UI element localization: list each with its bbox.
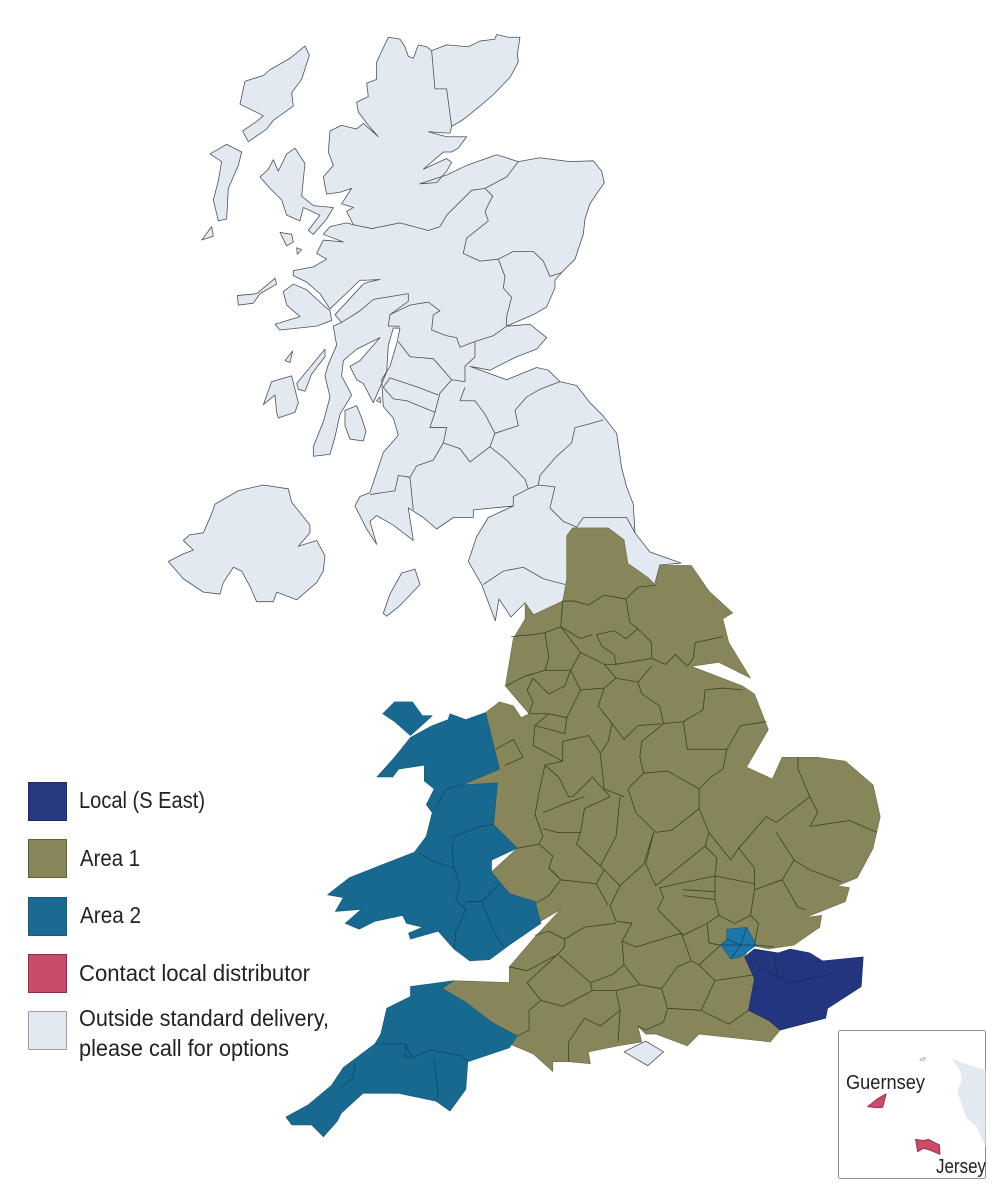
island: Islay [263,376,298,418]
region: Northern Ireland [168,485,325,602]
island: Isle of Man [383,569,420,616]
icon: Jersey [916,1139,940,1154]
county boundaries: Area 2 [339,785,503,1101]
map: England and Wales delivery zones [286,528,880,1137]
county boundaries: Scotland and northern England [342,51,635,584]
island: Colonsay [285,351,293,363]
legend item: Local (S East) [28,782,205,820]
zone: Local (S East), Kent [745,949,863,1030]
legend item: Contact local distributor: Contact local distributor [79,960,310,986]
inset: Channel Islands [838,1030,986,1178]
map: outside standard delivery (Scotland, Northern Ireland, northern England) [168,35,681,621]
region: Anglesey [383,702,432,735]
legend item: Local (S East): Local (S East) [79,787,205,813]
icon: Guernsey [868,1094,886,1108]
zone: Greater London, Area 2 [721,927,756,959]
island: Jura [297,349,325,391]
island: Rum [280,232,293,246]
legend item: Area 2 [28,898,141,936]
legend item: Area 2: Area 2 [80,902,141,928]
island: Barra [202,227,213,240]
legend item: Area 1: Area 1 [80,845,140,871]
region: Devon and Cornwall [286,981,517,1137]
island: Muck [297,248,302,254]
label: Guernsey: Guernsey [846,1072,925,1094]
legend item: Contact local distributor [28,954,310,992]
island: Skye [260,148,333,234]
legend item: Outside standard delivery: Outside standard delivery, [79,1005,329,1031]
label: Jersey: Jersey [936,1156,986,1178]
island: Bute [377,397,381,403]
island: Arran [345,406,366,441]
legend [28,782,329,1061]
legend item: Outside standard delivery: please call for options [79,1035,289,1061]
island: Coll and Tiree [237,278,277,305]
zone: Area 2 [286,702,541,1137]
region: Wales [327,713,541,961]
legend item: Outside standard delivery [28,1005,329,1061]
inset: French coast [952,1058,986,1147]
county boundaries: Area 1 [495,585,877,1062]
zone: Area 1 [442,528,880,1072]
region: Scottish mainland and far north of England [293,35,681,621]
island: Uists [210,144,242,221]
island: Lewis and Harris [240,46,309,142]
island: Isle of Wight [624,1041,664,1066]
inset: Sark outline [920,1057,925,1061]
legend item: Area 1 [28,840,140,878]
island: Mull [275,284,332,330]
